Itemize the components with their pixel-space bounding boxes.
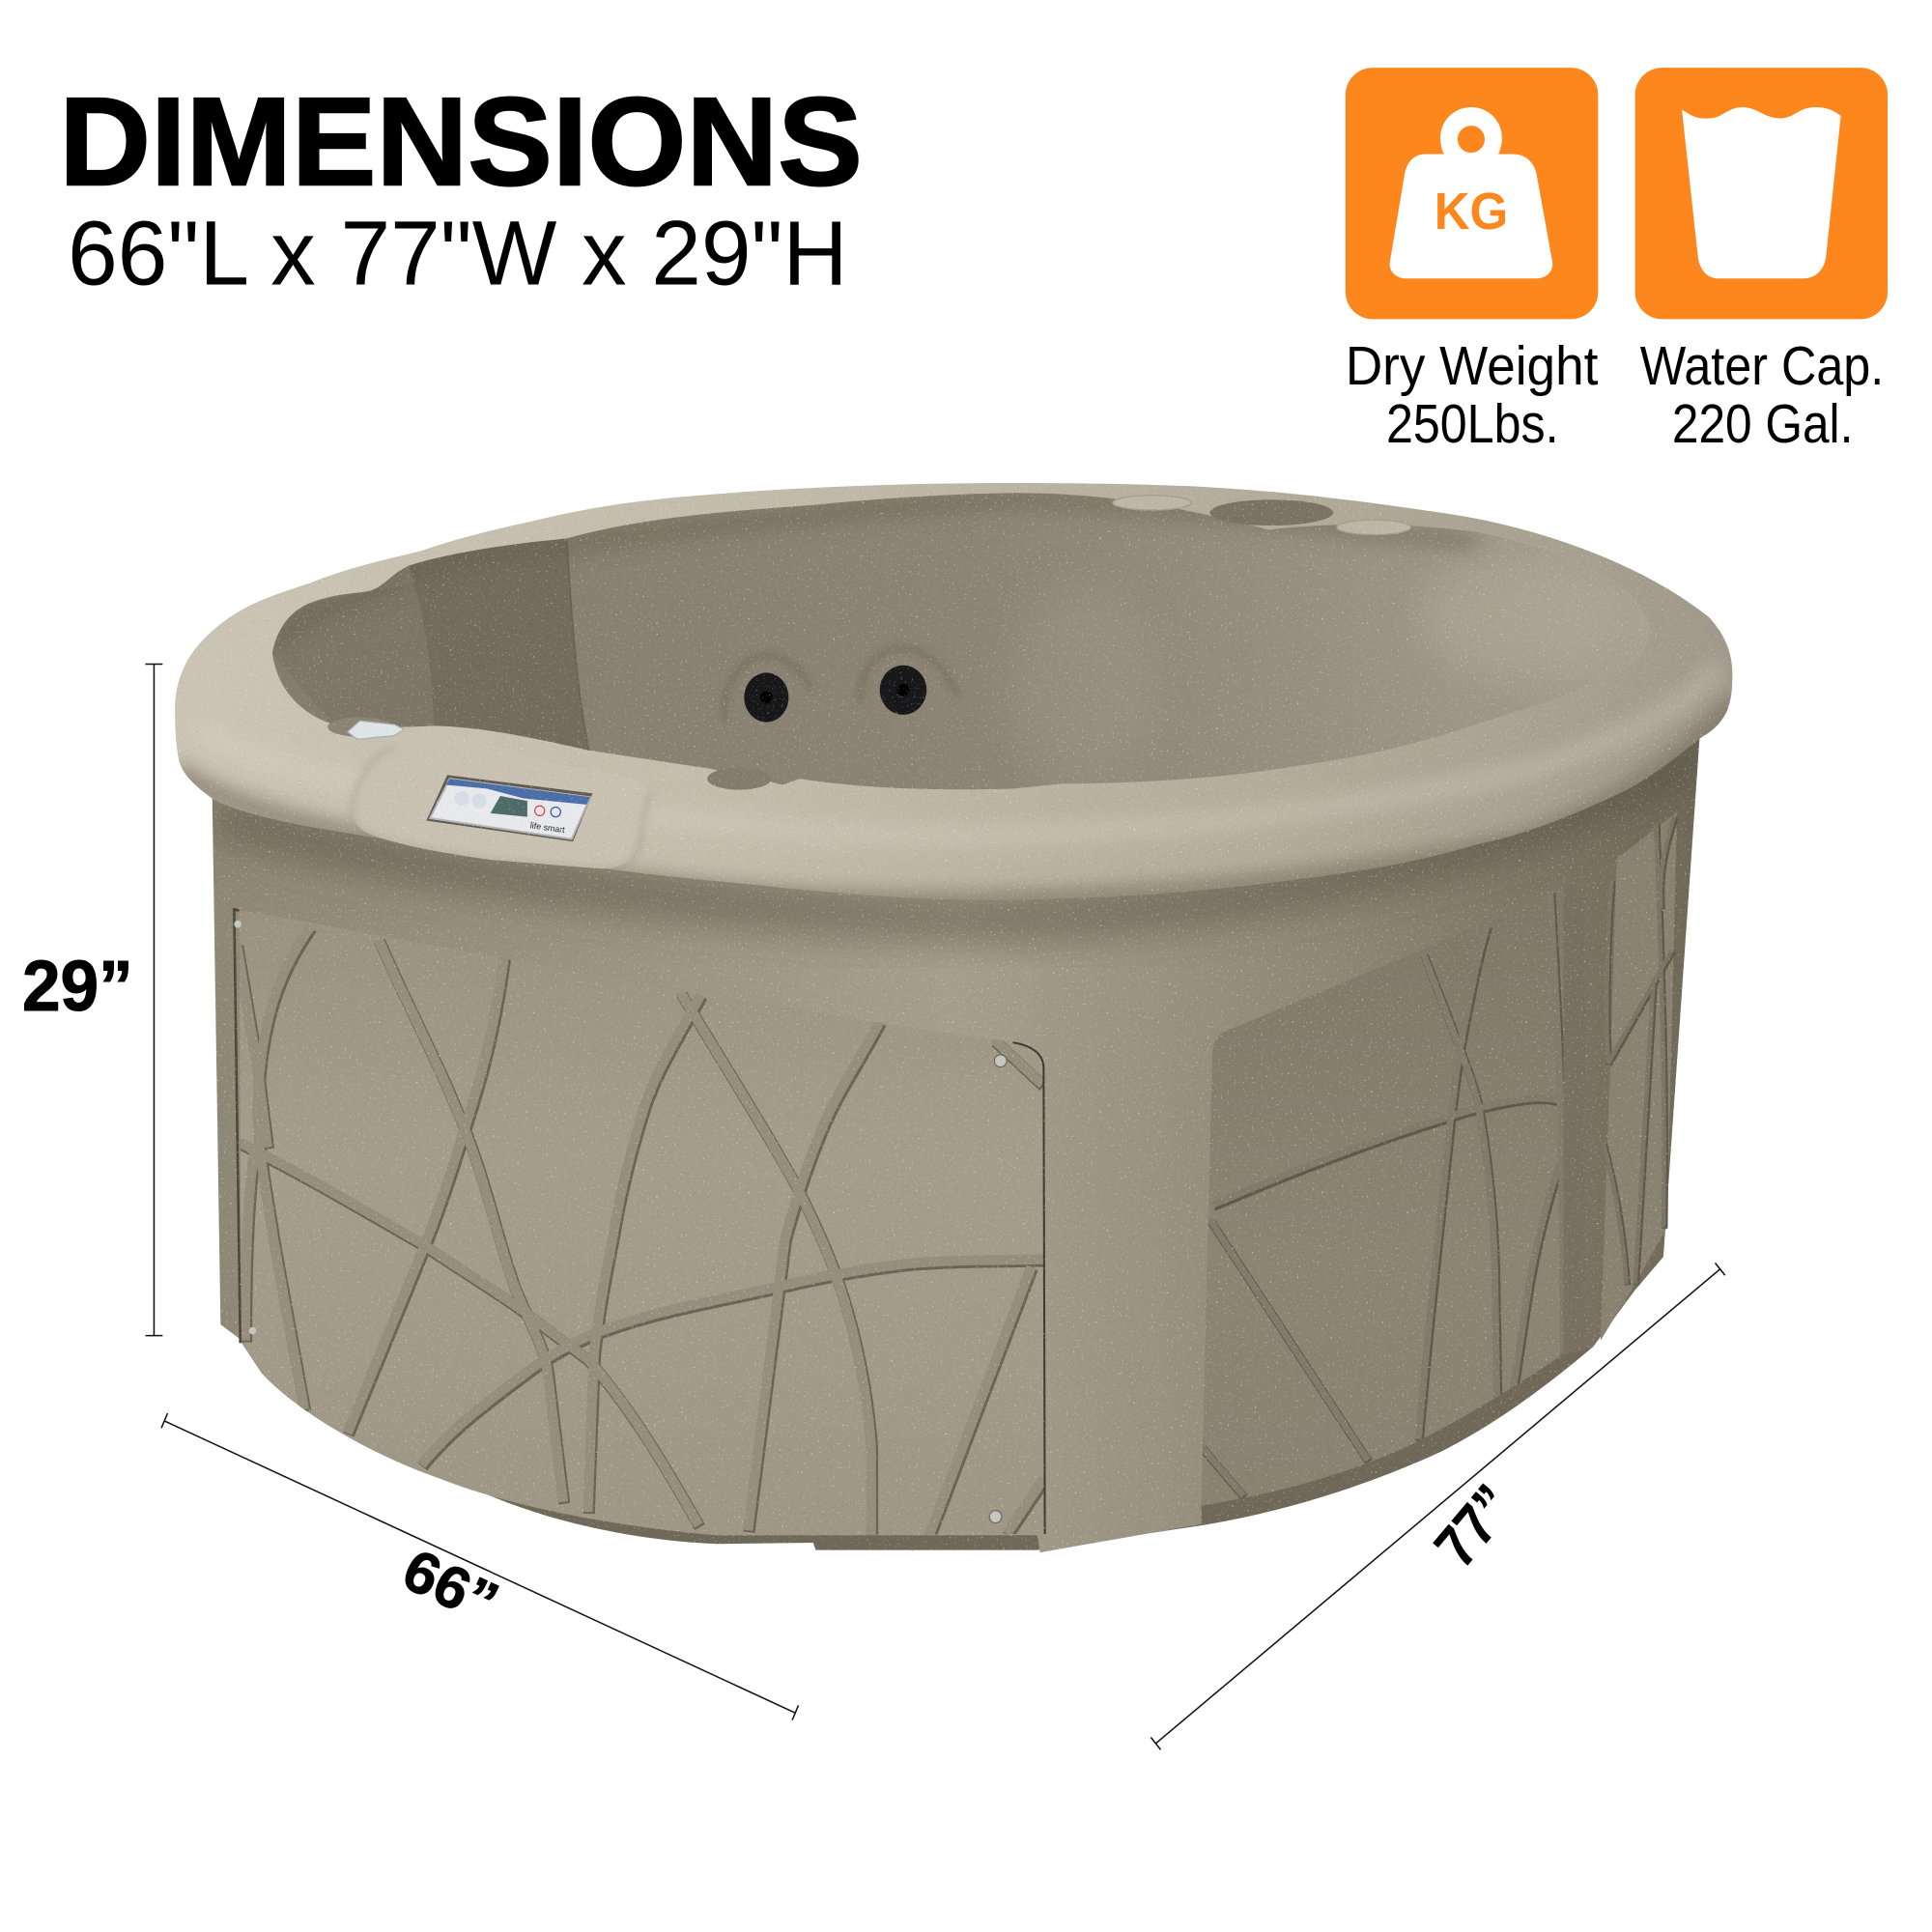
rim cup hole [707,768,771,790]
basin interior [272,493,1536,790]
pipe fitting [327,717,404,739]
dimension line: length [161,1413,799,1720]
title: DIMENSIONS: DIMENSIONS [59,71,863,212]
speckle texture [160,469,1749,1565]
icon: water capacity tile [1635,68,1888,319]
hot tub illustration [160,469,1749,1565]
right lattice panel [1202,885,1573,1506]
control panel [426,775,593,841]
left lattice panel [234,909,1045,1537]
jet left [724,656,810,722]
tub body [212,727,1700,1552]
panel screws [234,921,1007,1523]
dimension line: height [146,665,162,1336]
subtitle: overall measurements: 66"L x 77"W x 29"H [68,204,848,305]
jet right [860,648,957,715]
control bezel [353,727,649,868]
shadow under rim [212,752,1700,918]
control panel: life smart [529,820,566,835]
icon: water glass [1682,107,1841,278]
dimension label: 77 inches: 77” [1422,1472,1526,1579]
icon: dry weight tile [1346,68,1598,319]
rim [175,483,1732,900]
icon: kettlebell weight: KG [1435,184,1508,241]
back rim cup holder [1113,496,1410,535]
rim lower shading [173,666,1737,903]
right pillar shadow strip [1564,885,1586,1355]
label: dry weight: 250Lbs. [1386,393,1559,454]
back wall highlight [1010,579,1158,801]
top inner shadow [277,499,1479,647]
left alcove [272,579,434,727]
far right lattice panel [1601,812,1677,1341]
base skirt [431,1337,1593,1550]
dimension label: 66 inches: 66” [393,1536,508,1636]
icon: kettlebell weight [1390,107,1552,278]
label: water capacity: 220 Gal. [1672,393,1853,454]
label: water capacity: Water Cap. [1640,335,1884,396]
dimension line: width [1151,1263,1725,1749]
label: dry weight: Dry Weight [1346,335,1599,396]
dimension label: 29 inches: 29” [22,946,133,1026]
seat column [409,538,589,754]
